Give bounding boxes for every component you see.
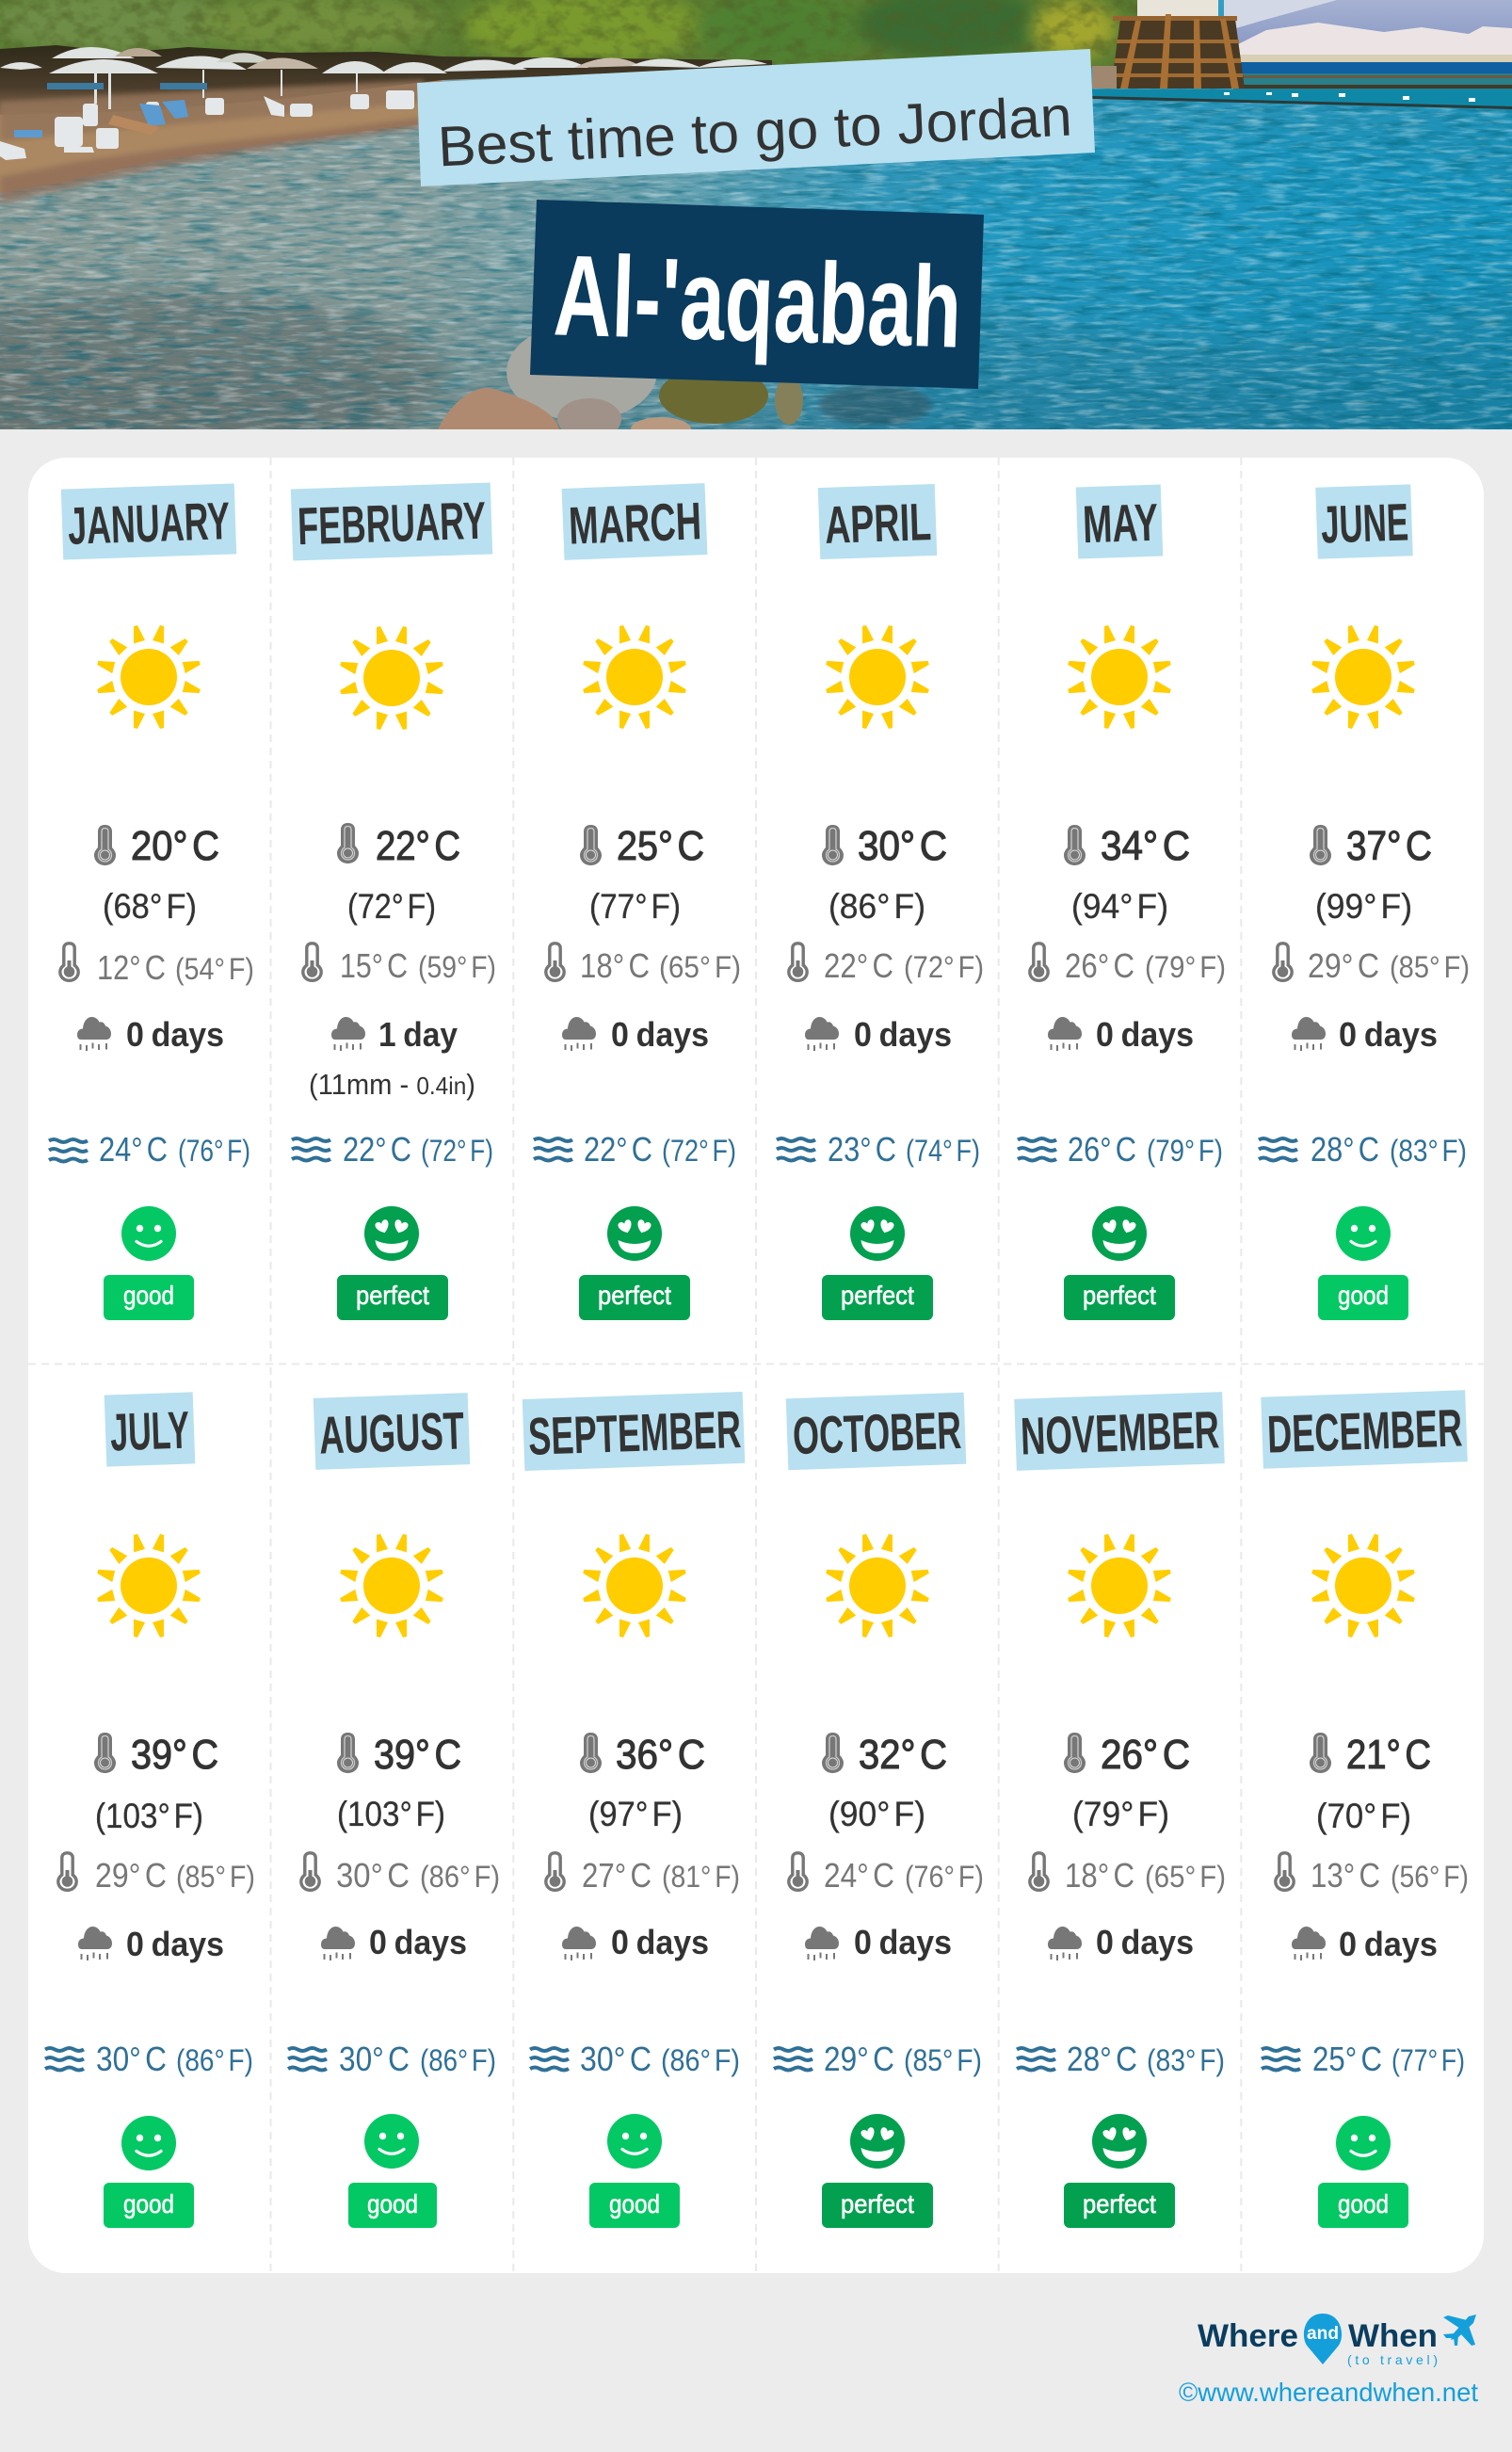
high temperature: 26° C [1101,1732,1190,1778]
icon: sun [339,626,444,730]
rating badge [579,1275,690,1320]
rainy days: 0 days [126,1925,224,1963]
rating badge: perfect [841,2189,914,2218]
rating badge [1064,2183,1175,2228]
icon: sun [825,1534,930,1637]
icon: rain cloud [562,1017,596,1051]
icon: sun [1311,625,1416,729]
icon: low temperature [301,1853,319,1890]
column: September [523,1392,745,2228]
high temperature: 36° C [616,1732,705,1778]
calendar card [28,458,1484,2273]
rating badge: perfect [1083,2189,1156,2218]
low temperature: (54° F) [175,952,254,986]
icon: high temperature [1064,1733,1086,1773]
rainy days: 0 days [1339,1015,1438,1054]
rating badge: good [123,2189,174,2218]
sea temperature: (86° F) [176,2043,253,2077]
low temperature: 22° C [824,946,893,985]
column: October [774,1393,984,2228]
icon: high temperature [1310,1733,1331,1773]
icon: sun [339,1534,444,1637]
icon: perfect smiley [364,1206,419,1261]
high temperature: 34° C [1101,823,1190,869]
low temperature: 18° C [1065,1856,1134,1895]
distant sky and mountains [1083,0,1512,109]
sea temperature: (72° F) [421,1134,493,1168]
icon: high temperature [337,823,359,863]
sea temperature: 22° C [343,1130,411,1169]
sea temperature: 24° C [99,1130,168,1169]
icon: good smiley [364,2114,419,2169]
rating badge [1318,1275,1408,1320]
rating badge: good [123,1281,174,1310]
high temperature Fahrenheit: (94° F) [1071,887,1168,926]
icon: perfect smiley [1092,1206,1147,1261]
logo: Where and When: and [1307,2324,1339,2344]
sea temperature: 28° C [1311,1130,1379,1169]
low temperature: 13° C [1311,1856,1380,1895]
subtitle banner: Best time to go to Jordan [437,85,1073,178]
rating badge [1064,1275,1175,1320]
beach umbrellas [0,47,767,109]
rating badge [348,2183,437,2228]
rating badge: good [1338,1281,1389,1310]
wooden tower [1092,0,1245,89]
high temperature Fahrenheit: (99° F) [1315,887,1412,926]
icon: sea [45,2048,84,2070]
logo: Where and When: When [1348,2318,1438,2354]
icon: sea [1018,1138,1056,1160]
month label: March [562,483,707,560]
logo: Where and When: Where [1198,2318,1298,2354]
high temperature Fahrenheit: (103° F) [95,1797,203,1835]
high temperature: 37° C [1346,823,1432,869]
rating badge [104,2183,194,2228]
icon: low temperature [546,1853,564,1890]
website credit: ©www.whereandwhen.net [1179,2378,1478,2407]
icon: perfect smiley [850,2114,905,2169]
hero photo: beach and sea at Aqaba [0,0,1512,461]
month label: July [105,1392,195,1467]
low temperature: (65° F) [659,950,741,984]
low temperature: (76° F) [905,1860,984,1894]
high temperature: 30° C [858,823,947,869]
month label: June [1315,484,1413,559]
icon: low temperature [1030,944,1048,980]
month label: January: JANUARY [67,491,231,556]
low temperature: 29° C [95,1856,167,1895]
icon: good smiley [1336,1206,1391,1261]
icon: high temperature [822,825,844,865]
rainy days: 0 days [854,1015,952,1054]
high temperature Fahrenheit: (79° F) [1072,1795,1169,1833]
sea temperature: (86° F) [661,2043,740,2077]
high temperature: 22° C [376,823,460,869]
icon: perfect smiley [607,1206,662,1261]
icon: rain cloud [321,1927,355,1960]
low temperature: (81° F) [662,1860,740,1894]
icon: high temperature [337,1733,359,1773]
column: December [1261,1390,1469,2228]
icon: rain cloud [78,1927,112,1960]
high temperature: 20° C [131,823,219,869]
icon: rain cloud [805,1927,839,1960]
low temperature: (59° F) [418,950,496,984]
low temperature: 30° C [336,1856,410,1895]
high temperature Fahrenheit: (86° F) [828,887,925,926]
column: February [291,483,496,1320]
icon: sea [530,2048,569,2070]
shoreline rocks [438,335,934,429]
column: November [1014,1392,1226,2228]
icon: sun [825,625,930,729]
month label: May: MAY [1082,492,1159,554]
sea temperature: 28° C [1067,2040,1137,2078]
low temperature: (85° F) [176,1860,255,1894]
rainy days: 0 days [1096,1923,1194,1961]
rating badge: perfect [598,1281,671,1310]
icon: perfect smiley [850,1206,905,1261]
high temperature Fahrenheit: (97° F) [588,1795,683,1833]
icon: rain cloud [1292,1017,1326,1051]
sea temperature: (83° F) [1390,1134,1467,1168]
icon: low temperature [789,944,807,980]
low temperature: 24° C [824,1856,894,1895]
icon: good smiley [607,2114,662,2169]
icon: good smiley [121,1206,176,1261]
icon: low temperature [1274,944,1292,980]
low temperature: (65° F) [1145,1860,1226,1894]
logo: Where and When: (to travel) [1347,2352,1438,2367]
logo: Where and When [1198,2314,1476,2367]
icon: rain cloud [562,1927,596,1960]
icon: sea [774,2048,812,2070]
high temperature: 39° C [374,1732,461,1778]
high temperature Fahrenheit: (103° F) [337,1795,445,1833]
icon: sun [1067,625,1172,729]
icon: high temperature [94,1733,116,1773]
icon: good smiley [1336,2116,1391,2170]
month label: August: AUGUST [318,1400,465,1465]
month label: July: JULY [109,1400,190,1461]
high temperature Fahrenheit: (72° F) [347,887,436,926]
rainy days: 0 days [854,1923,952,1961]
sea temperature: 30° C [339,2040,410,2078]
sea temperature: (72° F) [662,1134,736,1168]
month label: January [61,483,236,560]
sea temperature: 23° C [828,1130,896,1169]
icon: sun [582,1534,687,1637]
icon: perfect smiley [1092,2114,1147,2169]
icon: rain cloud [331,1017,365,1051]
rating badge: perfect [841,1281,914,1310]
sea temperature: (83° F) [1147,2043,1225,2077]
high temperature: 21° C [1346,1732,1431,1778]
rating badge: good [367,2189,418,2218]
icon: rain cloud [77,1017,111,1051]
rating badge: perfect [1083,1281,1156,1310]
rating badge: good [609,2189,660,2218]
icon: sea [292,1138,330,1160]
icon: high temperature [822,1733,844,1773]
column: March [534,483,741,1320]
rainfall amount: (11mm - 0.4in) [309,1068,475,1101]
icon: high temperature [580,825,602,865]
title banner [530,200,984,389]
icon: map pin [1304,2314,1342,2364]
month label: August [314,1393,470,1470]
rating badge [822,1275,933,1320]
month label: November [1014,1392,1225,1471]
low temperature: (86° F) [420,1860,500,1894]
low temperature: 15° C [340,946,408,985]
rating badge [589,2183,680,2228]
sea temperature: (85° F) [904,2043,982,2077]
icon: sea [1262,2048,1300,2070]
high temperature Fahrenheit: (70° F) [1316,1797,1411,1835]
icon: sun [96,1534,201,1637]
high temperature Fahrenheit: (68° F) [103,887,197,926]
rainy days: 0 days [1096,1015,1194,1054]
rating badge [337,1275,448,1320]
month label: September [523,1392,745,1471]
icon: low temperature [789,1853,807,1890]
month label: April [818,484,937,559]
rating badge [1318,2183,1408,2228]
rainy days: 0 days [611,1923,709,1961]
icon: high temperature [580,1733,602,1773]
rainy days: 1 day [378,1015,458,1054]
icon: sea [1259,1138,1297,1160]
sea temperature: (74° F) [906,1134,980,1168]
icon: rain cloud [1048,1017,1082,1051]
month label: March: MARCH [568,491,702,556]
icon: low temperature [58,1853,76,1890]
sea temperature: 25° C [1312,2040,1382,2078]
sea temperature: 22° C [584,1130,652,1169]
rating badge [822,2183,933,2228]
icon: sea [288,2048,327,2070]
icon: airplane [1443,2315,1476,2346]
low temperature: 18° C [580,946,650,985]
icon: low temperature [1276,1853,1294,1890]
icon: sun [1067,1534,1172,1637]
icon: sun [96,625,201,729]
month label: November: NOVEMBER [1020,1399,1220,1466]
icon: good smiley [121,2116,176,2170]
sea temperature: 30° C [96,2040,167,2078]
icon: high temperature [1310,825,1331,865]
icon: sea [49,1139,88,1162]
title banner: Al-'aqabah [552,231,963,372]
icon: low temperature [303,944,321,980]
sea temperature: (79° F) [1147,1134,1223,1168]
rainy days: 0 days [1339,1925,1438,1963]
sea temperature: (76° F) [178,1134,250,1168]
icon: low temperature [60,944,78,980]
icon: rain cloud [1292,1927,1326,1960]
icon: rain cloud [805,1017,839,1051]
icon: low temperature [546,944,564,980]
month label: February: FEBRUARY [297,491,487,556]
low temperature: 29° C [1308,946,1379,985]
month label: April: APRIL [824,492,932,555]
icon: high temperature [94,825,116,865]
icon: sea [777,1138,815,1160]
column: January [49,483,254,1320]
icon: low temperature [1030,1853,1048,1890]
high temperature: 32° C [859,1732,947,1778]
rainy days: 0 days [369,1923,467,1961]
month label: June: JUNE [1320,492,1409,555]
low temperature: (72° F) [904,950,984,984]
month label: February [291,483,492,560]
column: June [1259,484,1470,1320]
sea temperature: 29° C [824,2040,894,2078]
month label: September: SEPTEMBER [527,1399,742,1466]
icon: sun [582,625,687,729]
column: May [1018,485,1226,1320]
sea temperature: (86° F) [420,2043,496,2077]
low temperature: (79° F) [1145,950,1226,984]
rainy days: 0 days [126,1015,224,1054]
column: July [45,1392,255,2228]
icon: sea [1017,2048,1055,2070]
low temperature: (85° F) [1390,950,1470,984]
beach chairs [0,90,414,160]
rating badge [104,1275,194,1320]
icon: rain cloud [1048,1927,1082,1960]
low temperature: 26° C [1065,946,1134,985]
low temperature: 27° C [582,1856,651,1895]
rainy days: 0 days [611,1015,709,1054]
icon: sea [534,1138,572,1160]
subtitle banner [417,49,1095,186]
sea temperature: 26° C [1068,1130,1136,1169]
month label: May [1076,485,1163,558]
high temperature Fahrenheit: (77° F) [589,887,681,926]
sea temperature: (77° F) [1391,2043,1465,2077]
month label: October: OCTOBER [792,1400,962,1465]
high temperature Fahrenheit: (90° F) [828,1795,925,1833]
icon: sun [1311,1534,1416,1637]
month label: October [786,1393,966,1470]
rating badge: good [1338,2189,1389,2218]
rating badge: perfect [356,1281,429,1310]
low temperature: (56° F) [1391,1860,1469,1894]
sea temperature: 30° C [580,2040,651,2078]
icon: high temperature [1064,825,1086,865]
column: April [777,484,984,1320]
column: August [288,1393,500,2228]
high temperature: 25° C [617,823,704,869]
low temperature: 12° C [97,948,166,987]
high temperature: 39° C [131,1732,218,1778]
